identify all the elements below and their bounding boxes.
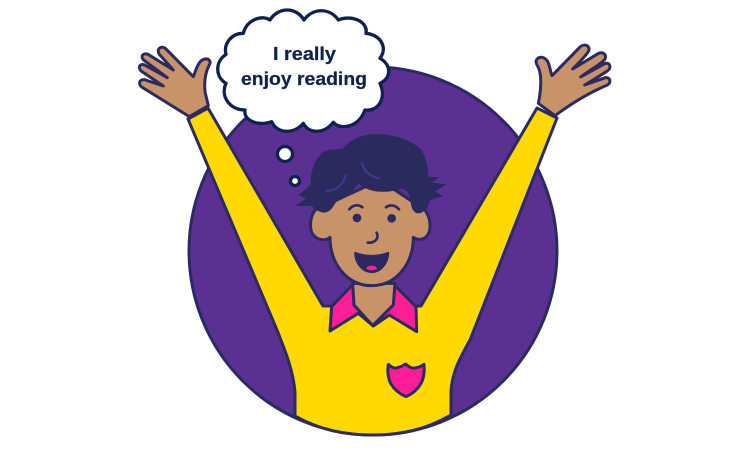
large thought dot xyxy=(278,146,292,162)
nose xyxy=(368,233,377,243)
thought bubble xyxy=(218,10,389,186)
eyebrows xyxy=(349,205,399,209)
cloud outline xyxy=(218,10,389,131)
yellow shirt with raised arms xyxy=(188,108,557,435)
pink shield badge xyxy=(388,364,424,397)
neck xyxy=(353,283,395,326)
thought text xyxy=(241,43,367,89)
pink collar xyxy=(330,286,417,332)
open mouth xyxy=(355,253,388,272)
thought text: I really xyxy=(273,43,337,64)
thought text: enjoy reading xyxy=(241,68,367,89)
hair highlights xyxy=(326,163,379,191)
purple background circle xyxy=(189,67,557,435)
small thought dot xyxy=(290,176,300,186)
face with ears xyxy=(310,180,430,286)
right hand xyxy=(536,45,610,116)
tongue xyxy=(366,266,377,270)
eyes xyxy=(353,214,396,223)
left hand xyxy=(139,47,210,117)
hair xyxy=(295,134,447,213)
head group xyxy=(295,134,447,332)
